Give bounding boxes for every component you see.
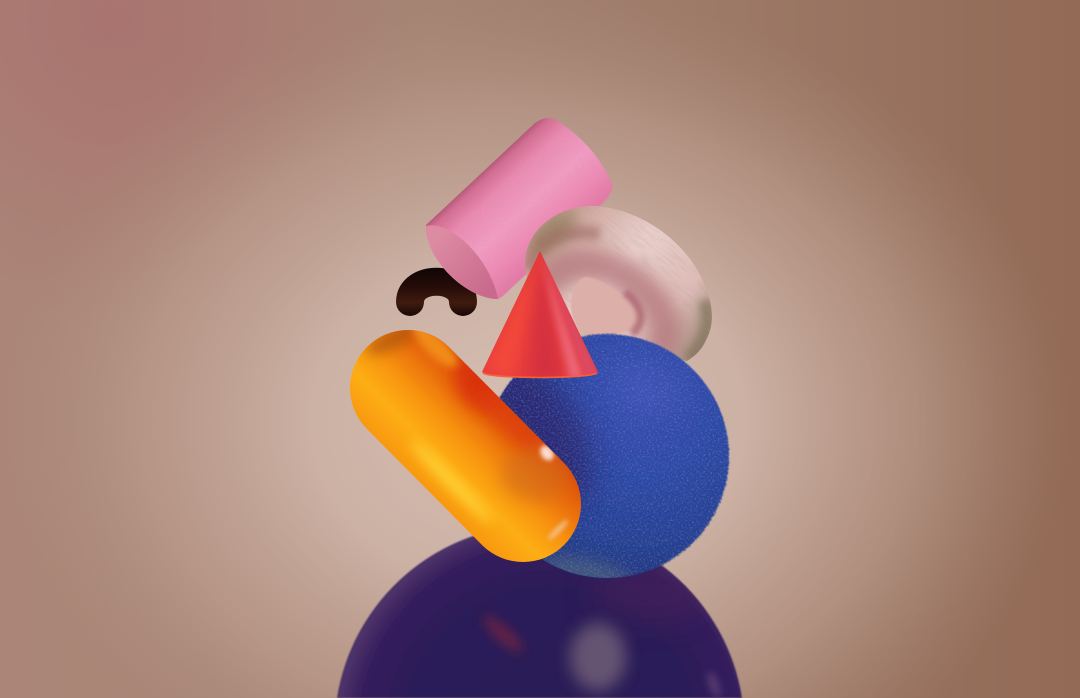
cylinder end cap xyxy=(426,225,498,299)
black arch xyxy=(410,282,463,302)
blue fuzzy sphere xyxy=(498,332,730,579)
torus hole xyxy=(570,277,636,336)
wooden torus xyxy=(525,206,712,361)
orange capsule xyxy=(350,317,581,562)
capsule dark top shade xyxy=(363,330,416,360)
red cone xyxy=(482,251,598,380)
pink cylinder xyxy=(426,118,613,299)
purple sphere xyxy=(337,525,742,698)
